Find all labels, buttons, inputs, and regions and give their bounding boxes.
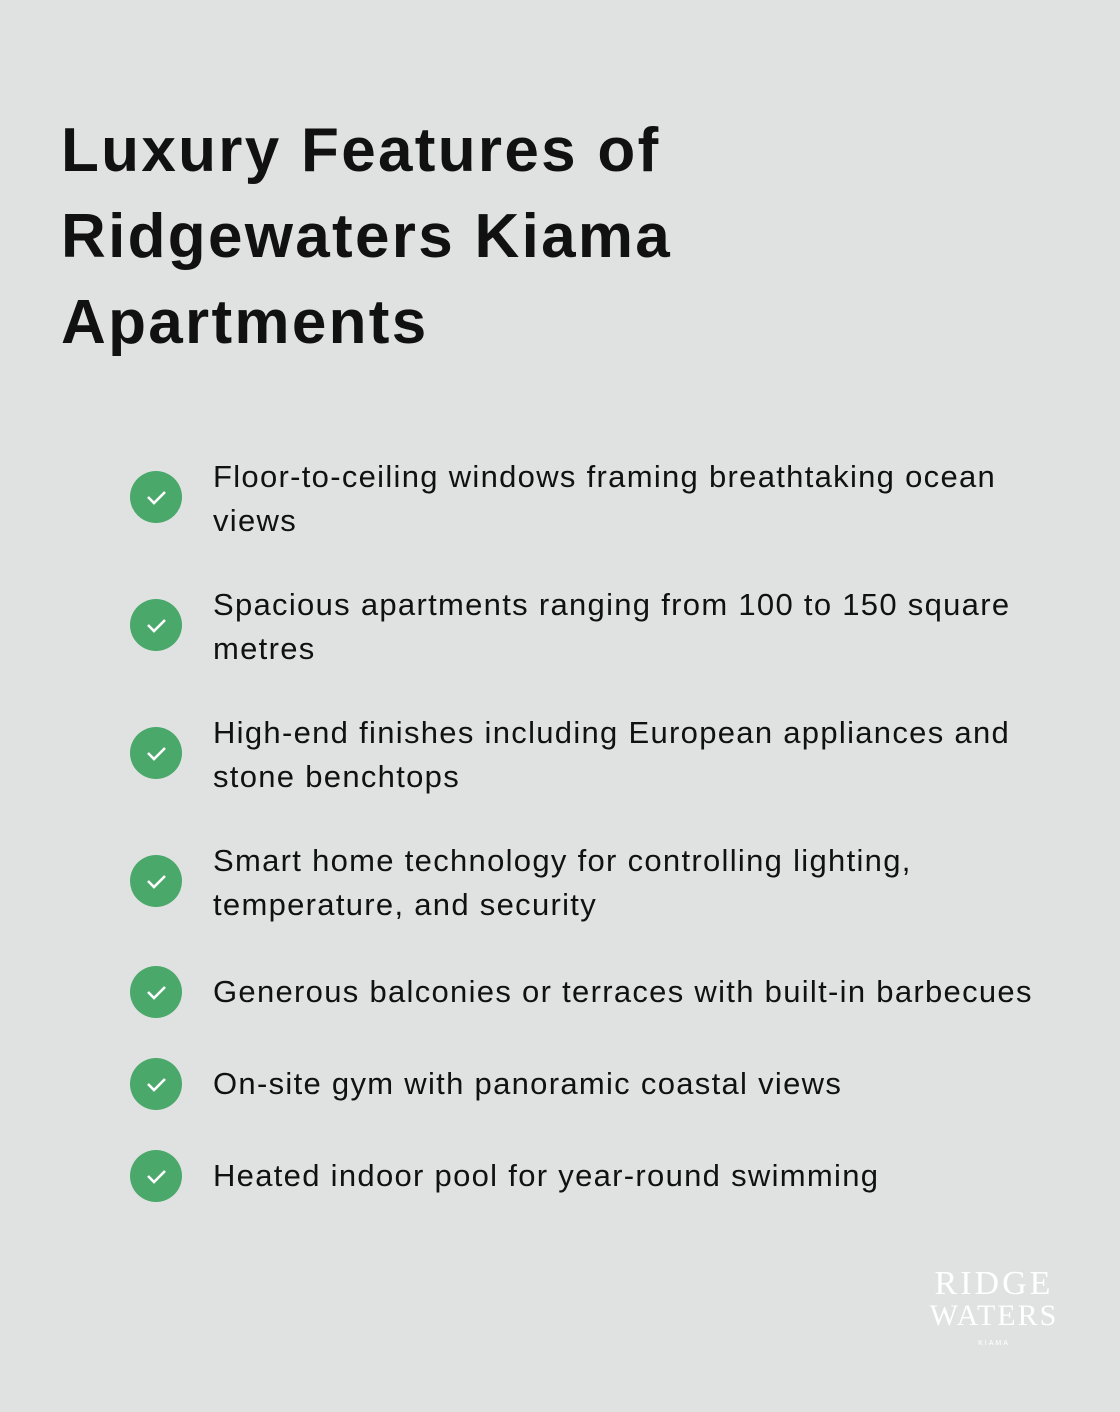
item 4 <box>130 843 912 922</box>
title: Apartments <box>61 288 429 357</box>
item 2: Spacious apartments ranging from 100 to 150 square <box>213 587 1010 622</box>
item 5 <box>130 966 1033 1018</box>
item 3 <box>130 715 1010 794</box>
item 3: stone benchtops <box>213 759 460 794</box>
title: Luxury Features of <box>61 116 661 185</box>
item 1: views <box>213 503 297 538</box>
item 7 <box>130 1150 879 1202</box>
logo: KIAMA <box>978 1340 1010 1347</box>
item 1: Floor-to-ceiling windows framing breathtaking ocean <box>213 459 996 494</box>
item 3: High-end finishes including European appliances and <box>213 715 1010 750</box>
item 2: metres <box>213 631 316 666</box>
item 5: Generous balconies or terraces with built-in barbecues <box>213 974 1033 1009</box>
logo: RIDGE <box>935 1265 1053 1302</box>
logo <box>930 1265 1058 1347</box>
item 6 <box>130 1058 842 1110</box>
item 4: Smart home technology for controlling lighting, <box>213 843 912 878</box>
item 4: temperature, and security <box>213 887 597 922</box>
title <box>61 116 672 357</box>
item 2 <box>130 587 1010 666</box>
item 1 <box>130 459 996 538</box>
item 6: On-site gym with panoramic coastal views <box>213 1066 842 1101</box>
item 7: Heated indoor pool for year-round swimming <box>213 1158 879 1193</box>
title: Ridgewaters Kiama <box>61 202 672 271</box>
logo: WATERS <box>930 1299 1058 1332</box>
